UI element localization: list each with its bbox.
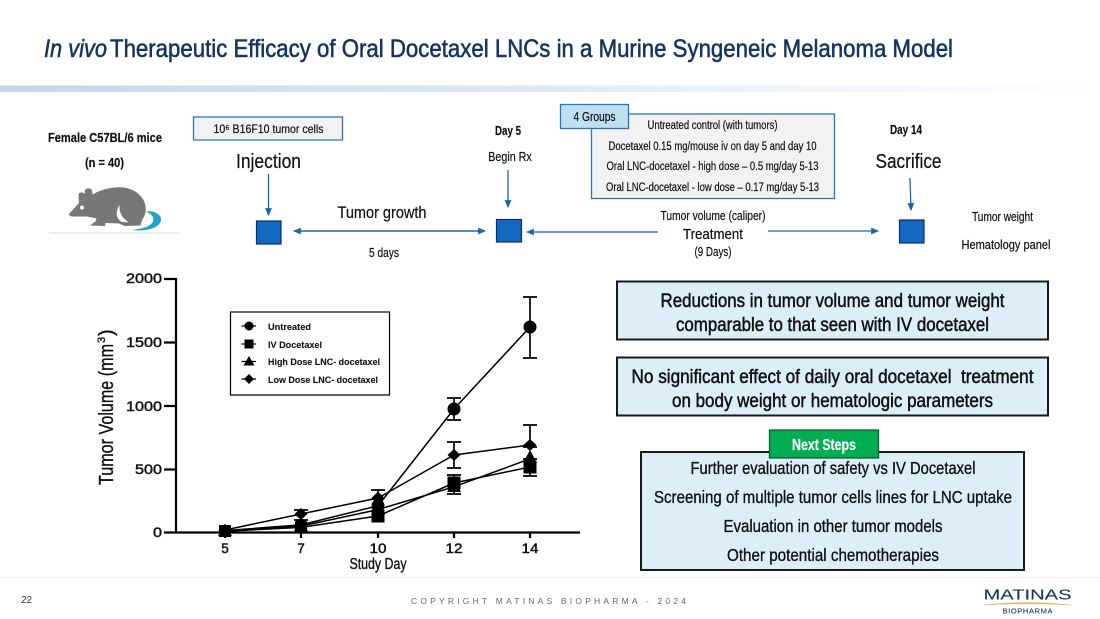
logo: Matinas Biopharma [984,586,1072,616]
callout: tumor reductions: Reductions in tumor volume and tumor weight [660,290,1005,312]
mouse description: (n = 40) [85,155,124,170]
injection label and arrow: Injection [236,151,301,173]
logo: Matinas Biopharma: MATINAS [984,586,1072,604]
callout: tumor reductions: comparable to that seen with IV docetaxel [676,314,989,336]
series markers [218,320,537,537]
tumor cells box [194,117,342,140]
y tick labels: 500 [135,462,162,477]
tumor cells box: 10⁶ B16F10 tumor cells [214,122,324,136]
y tick labels [126,271,162,540]
treatment arrow and labels: Tumor volume (caliper) [660,209,766,223]
treatment arrow and labels [527,209,878,259]
tumor growth arrow: 5 days [369,246,399,260]
tumor growth arrow [294,203,485,260]
groups box: Oral LNC-docetaxel - high dose – 0.5 mg/day 5-13 [606,161,818,173]
y axis title: Tumor Volume (mm [96,344,118,485]
treatment arrow and labels: (9 Days) [694,245,732,259]
groups box: Untreated control (with tumors) [648,120,778,132]
timeline square: injection [256,221,281,244]
y tick labels: 1500 [126,335,162,350]
day 5 label: Day 5 [495,123,521,138]
legend: High Dose LNC- docetaxel [268,357,380,367]
callout: no significant effect: on body weight or hematologic parameters [672,390,993,412]
y tick labels: 2000 [126,271,162,286]
title: Therapeutic Efficacy of Oral Docetaxel LNCs in a Murine Syngeneic Melanoma Model [110,35,953,63]
treatment arrow and labels: Treatment [683,226,744,243]
panel: next steps: Further evaluation of safety vs IV Docetaxel [690,458,976,478]
callout: no significant effect [617,358,1048,416]
tumor growth arrow: Tumor growth [338,203,426,222]
day 14 label: Sacrifice [876,151,942,173]
error bars [294,297,537,526]
groups box [592,114,834,198]
sacrifice readouts: Hematology panel [962,238,1050,252]
timeline square: day 14 [900,220,924,243]
panel: next steps: Other potential chemotherapies [727,545,939,565]
sacrifice readouts [962,210,1050,252]
day 5 label [488,123,532,207]
line chart: tumor volume [96,271,580,573]
timeline square: day 5 [496,220,522,242]
legend: Untreated [268,322,311,332]
y axis title: ) [96,329,118,336]
mouse description: Female C57BL/6 mice [48,130,162,145]
copyright footer: COPYRIGHT MATINAS BIOPHARMA - 2024 [411,596,686,606]
groups box: Oral LNC-docetaxel - low dose – 0.17 mg/day 5-13 [606,182,819,194]
x tick labels: 14 [522,541,539,556]
x tick labels: 7 [297,541,305,556]
mouse description [48,130,162,170]
header band [0,86,1100,92]
axes [164,278,580,538]
4 groups tag: 4 Groups [574,110,616,124]
injection label and arrow [236,151,301,215]
x tick labels [221,541,539,556]
icon: mouse [49,187,180,233]
x tick labels: 12 [446,541,462,556]
panel: next steps: Screening of multiple tumor cells lines for LNC uptake [654,487,1012,507]
panel: next steps [641,452,1024,570]
day 14 label [876,122,942,210]
4 groups tag [560,104,628,128]
sacrifice readouts: Tumor weight [972,210,1033,224]
page number: 22 [21,595,33,606]
logo: Matinas Biopharma: BIOPHARMA [1002,606,1052,616]
day 5 label: Begin Rx [488,149,532,164]
callout: no significant effect: No significant effect of daily oral docetaxel treatment [632,366,1034,388]
next steps tag: Next Steps [792,437,856,454]
groups box: Docetaxel 0.15 mg/mouse iv on day 5 and day 10 [608,141,816,153]
day 14 label: Day 14 [890,122,923,137]
x axis title: Study Day [350,556,406,573]
legend [230,312,390,395]
callout: tumor reductions [617,282,1048,340]
y axis title: 3 [96,337,108,343]
x tick labels: 5 [221,541,229,556]
y tick labels: 0 [153,525,162,540]
next steps tag [770,430,878,458]
legend: IV Docetaxel [268,340,322,350]
y tick labels: 1000 [126,399,162,414]
series lines [225,327,530,531]
x tick labels: 10 [370,541,386,556]
legend: Low Dose LNC- docetaxel [268,375,378,385]
panel: next steps: Evaluation in other tumor models [724,516,943,536]
title: In vivo [44,35,107,63]
